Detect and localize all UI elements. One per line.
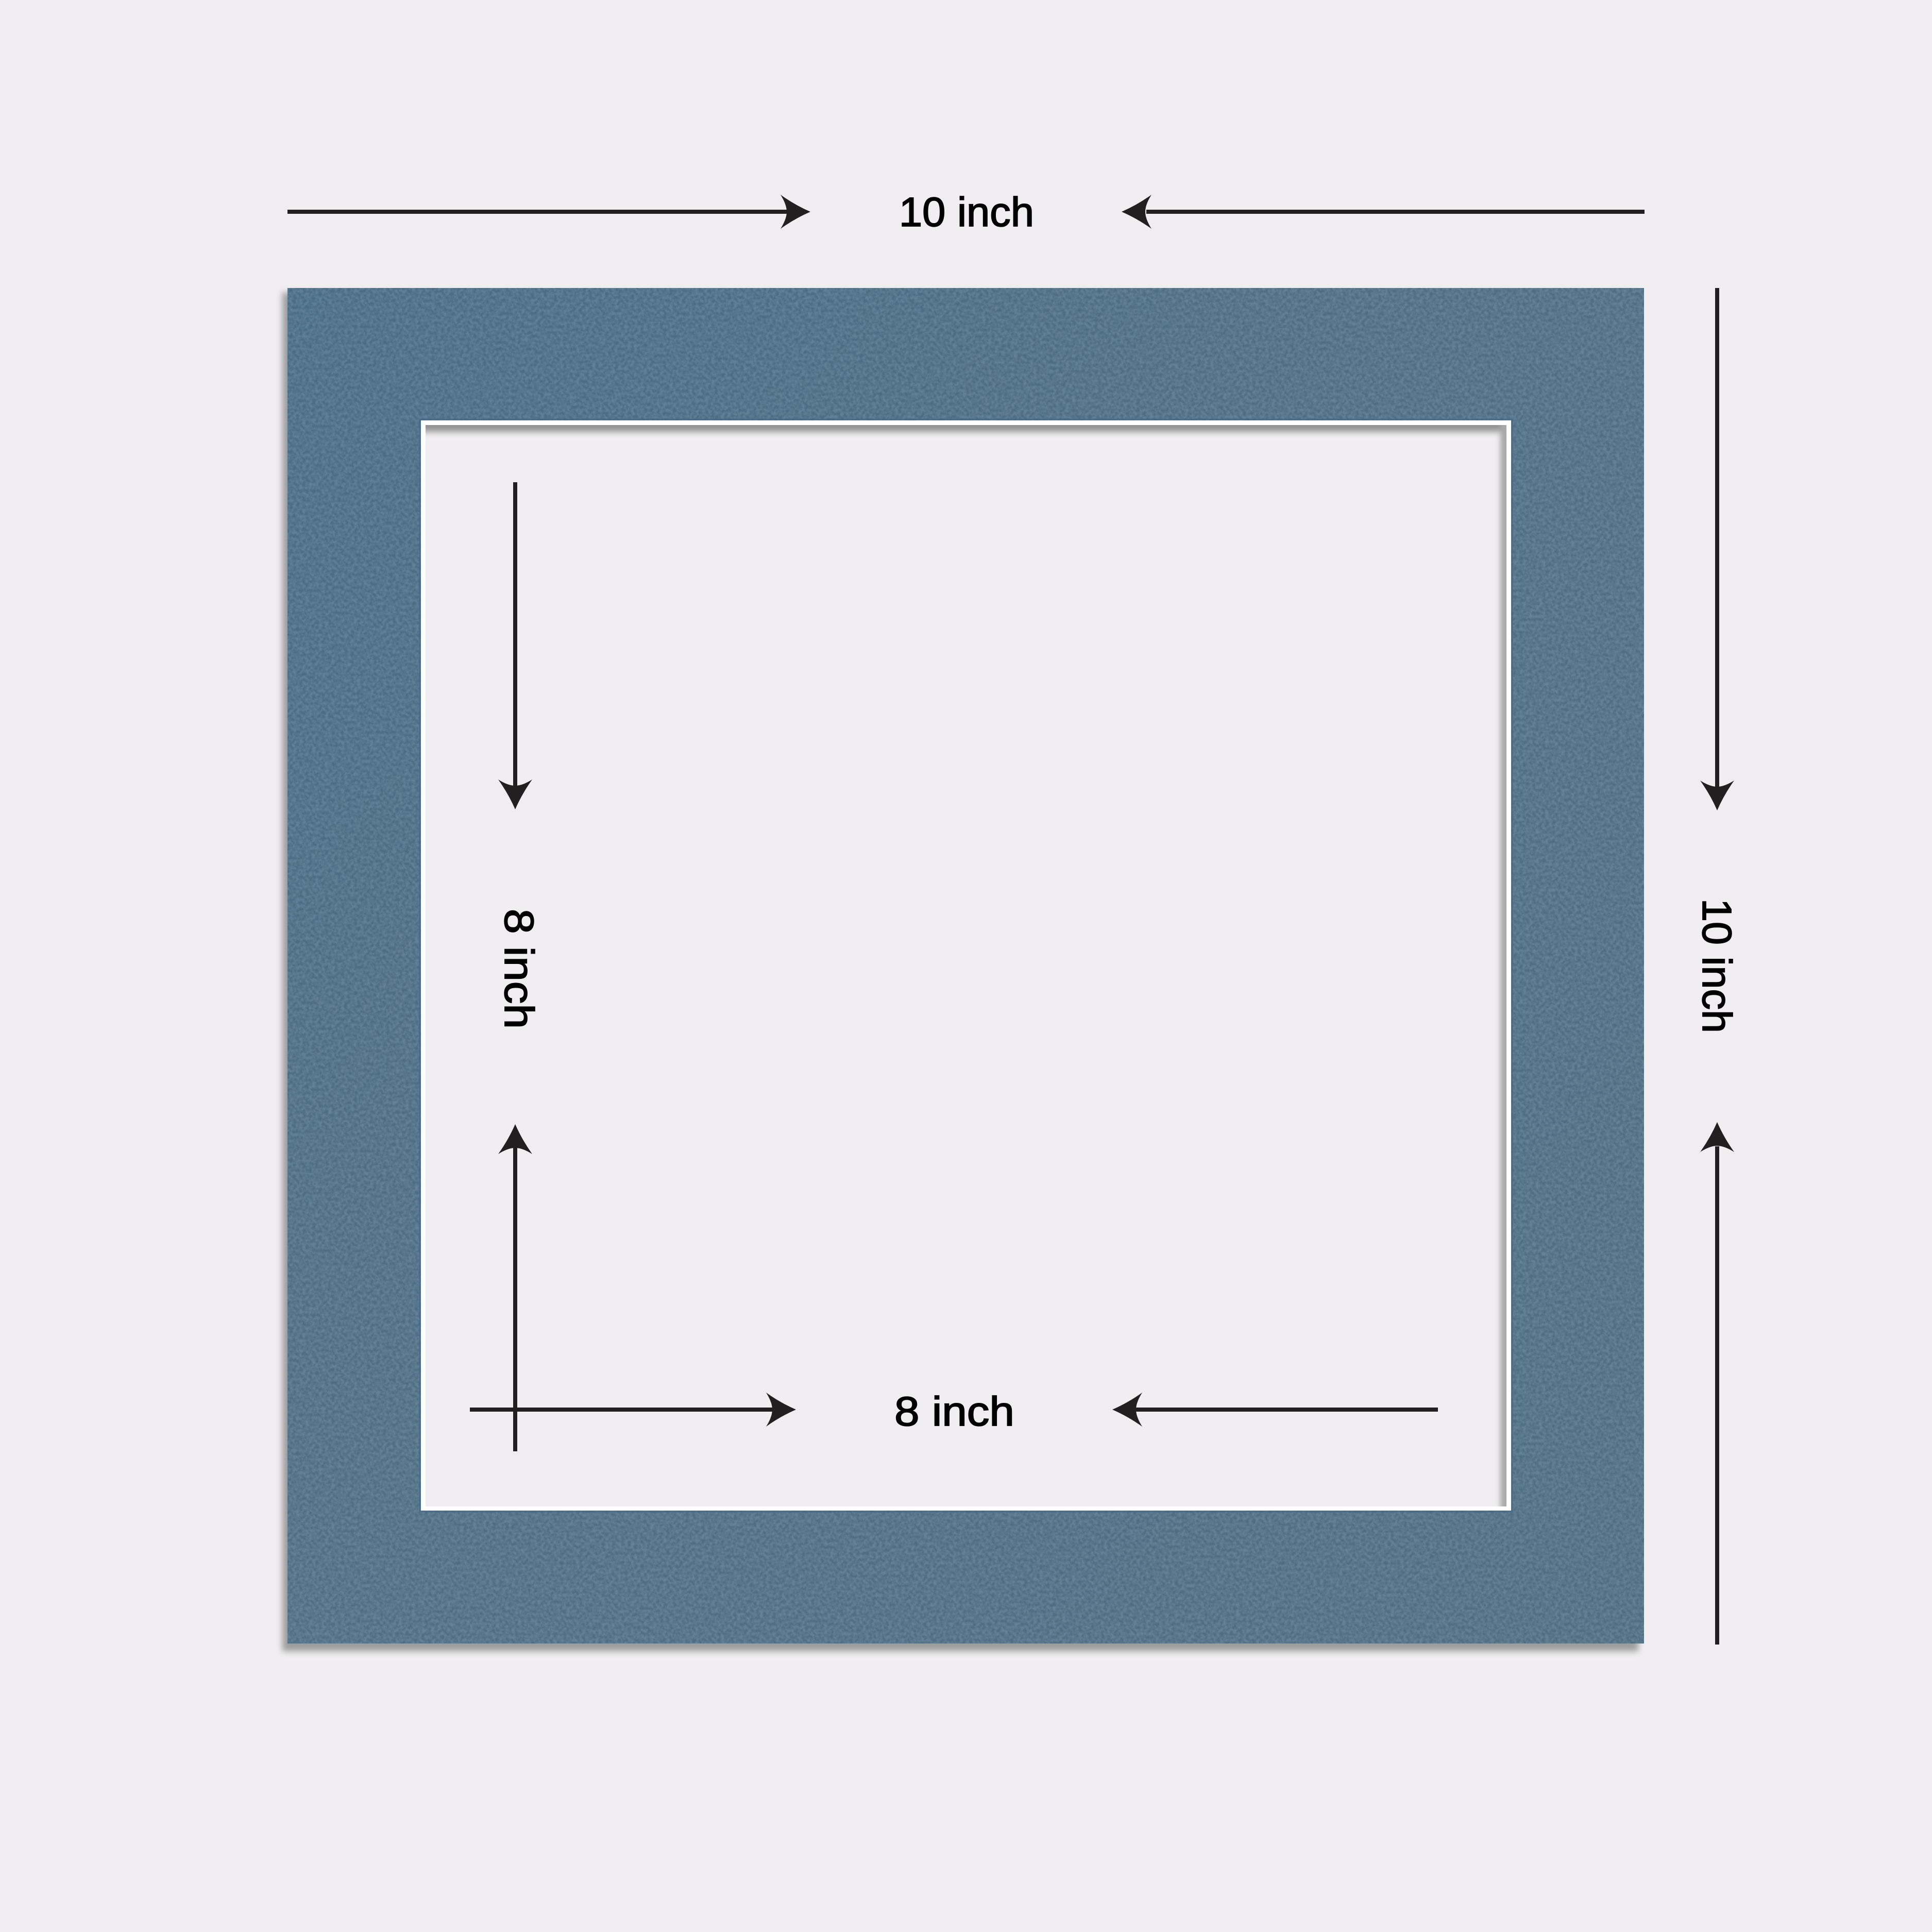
label: outer height: 10 inch [1694,899,1740,1033]
label: inner height: 8 inch [496,909,542,1029]
arrow: outer width, left side [287,195,810,229]
arrow: outer height, top side [1700,288,1734,810]
panel: mat board [282,288,1644,1651]
arrow: outer height, bottom side [1700,1122,1734,1645]
arrow: inner height, bottom side [498,1124,532,1451]
label: inner width: 8 inch [894,1388,1014,1434]
mat drop shadow [282,293,1638,1651]
label: outer width: 10 inch [899,189,1034,235]
window opening with white bevel [402,407,1526,1540]
arrow: inner width, left side [470,1393,796,1427]
mat surface with paper texture [287,288,1644,1643]
arrow: inner height, top side [498,482,532,809]
arrow: inner width, right side [1112,1393,1438,1427]
arrow: outer width, right side [1122,195,1645,229]
infographic canvas [278,195,1734,1655]
